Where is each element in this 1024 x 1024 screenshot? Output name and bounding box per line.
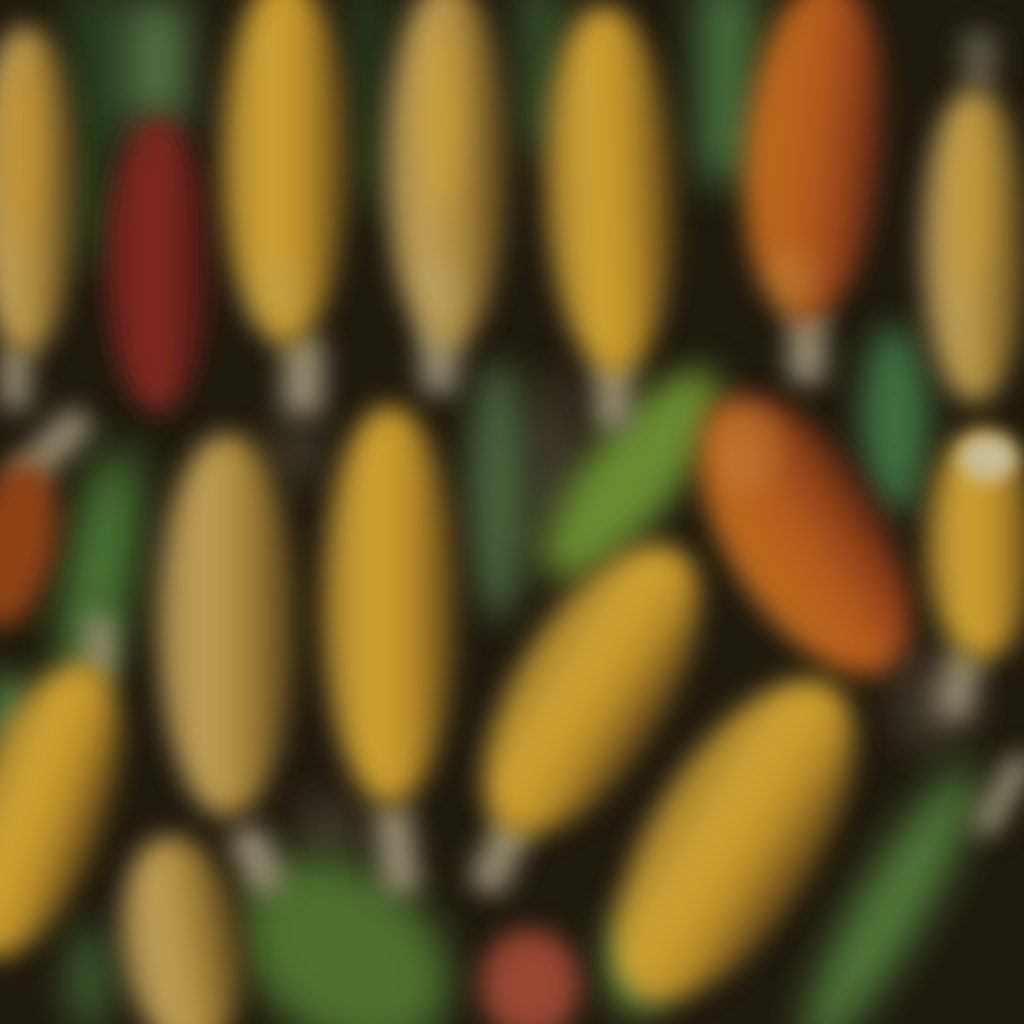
cob: top orange bbox=[730, 0, 900, 327]
bottom leaves bbox=[68, 650, 1002, 993]
centre and right leaves bbox=[0, 325, 929, 760]
cob tip: right pale bbox=[958, 434, 1018, 482]
cob: bottom left bbox=[0, 641, 155, 979]
cob: red bbox=[106, 117, 210, 413]
cob: top yellow 2 bbox=[539, 3, 681, 377]
cob: left orange bbox=[0, 453, 71, 637]
cob: angled orange bbox=[655, 360, 955, 710]
cob: lower pale bbox=[157, 433, 297, 817]
cob: top pale bbox=[385, 0, 509, 350]
green leaves bbox=[47, 0, 755, 699]
grey-brown ground bbox=[270, 370, 970, 860]
cob: top yellow 1 bbox=[221, 0, 349, 345]
cob: bottom red bbox=[480, 869, 580, 981]
cob: bottom angled bbox=[567, 581, 903, 979]
cob: lower yellow bbox=[322, 405, 458, 805]
cob: top right bbox=[921, 87, 1024, 403]
cob: angled centre bbox=[440, 510, 744, 870]
cob: right yellow bbox=[926, 430, 1024, 660]
cob: top left bbox=[0, 25, 78, 355]
cob: bottom pale bbox=[107, 768, 257, 1002]
